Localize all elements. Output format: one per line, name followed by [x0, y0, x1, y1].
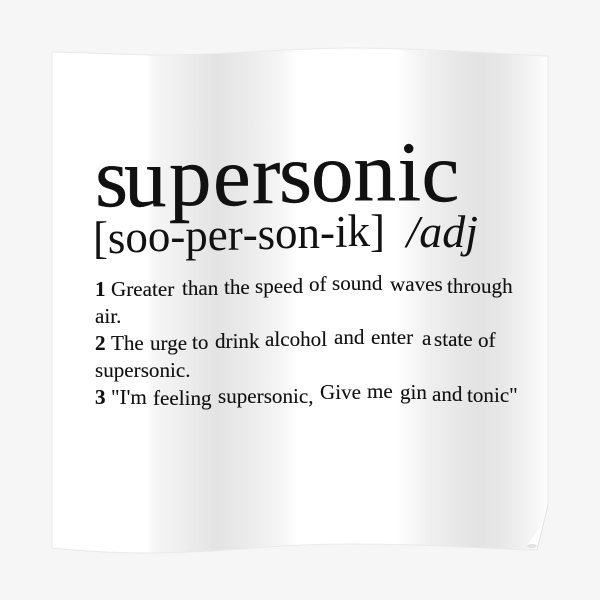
definition 1: than [182, 276, 219, 300]
definition 1: Greater [111, 277, 174, 301]
definition 2 [95, 325, 497, 382]
definition 3: supersonic, [218, 384, 314, 408]
definition 2: and [334, 325, 365, 349]
definition 1: the [224, 275, 250, 299]
definition 1: air. [95, 304, 121, 328]
definition 1: through [447, 274, 513, 298]
definition 3: gin [400, 380, 427, 404]
definition 2: a [422, 326, 432, 350]
definition 2: enter [371, 325, 413, 349]
definition 3: tonic" [467, 383, 518, 407]
definition 2: alcohol [265, 327, 327, 351]
definition 3 [95, 379, 518, 410]
part of speech: /adj [404, 206, 478, 257]
definition 3: "I'm [111, 385, 147, 409]
title word: supersonic [95, 125, 459, 225]
definition 1 [95, 271, 513, 328]
definition 1: speed [255, 274, 303, 298]
definition 1: of [309, 272, 328, 296]
definition 2: The [111, 331, 144, 355]
definition 2: supersonic. [95, 358, 190, 382]
definition 3: 3 [95, 385, 106, 409]
definition 3: me [367, 379, 393, 403]
definition 3: Give [320, 380, 361, 404]
definition 3: and [432, 382, 463, 406]
definition 2: 2 [95, 331, 106, 355]
poster sheet [52, 48, 548, 553]
definition 2: drink [215, 329, 260, 353]
definition 2: of [478, 328, 497, 352]
icon: curled page corner [527, 505, 548, 550]
definition 1: sound [332, 271, 383, 295]
definition 2: to [192, 330, 208, 354]
pronunciation: [soo-per-son-ik] [93, 206, 385, 263]
definition 1: 1 [95, 277, 106, 301]
definition 2: urge [150, 331, 187, 355]
definition 1: waves [390, 272, 443, 296]
definition 2: state [434, 327, 473, 351]
definition 3: feeling [153, 386, 212, 410]
